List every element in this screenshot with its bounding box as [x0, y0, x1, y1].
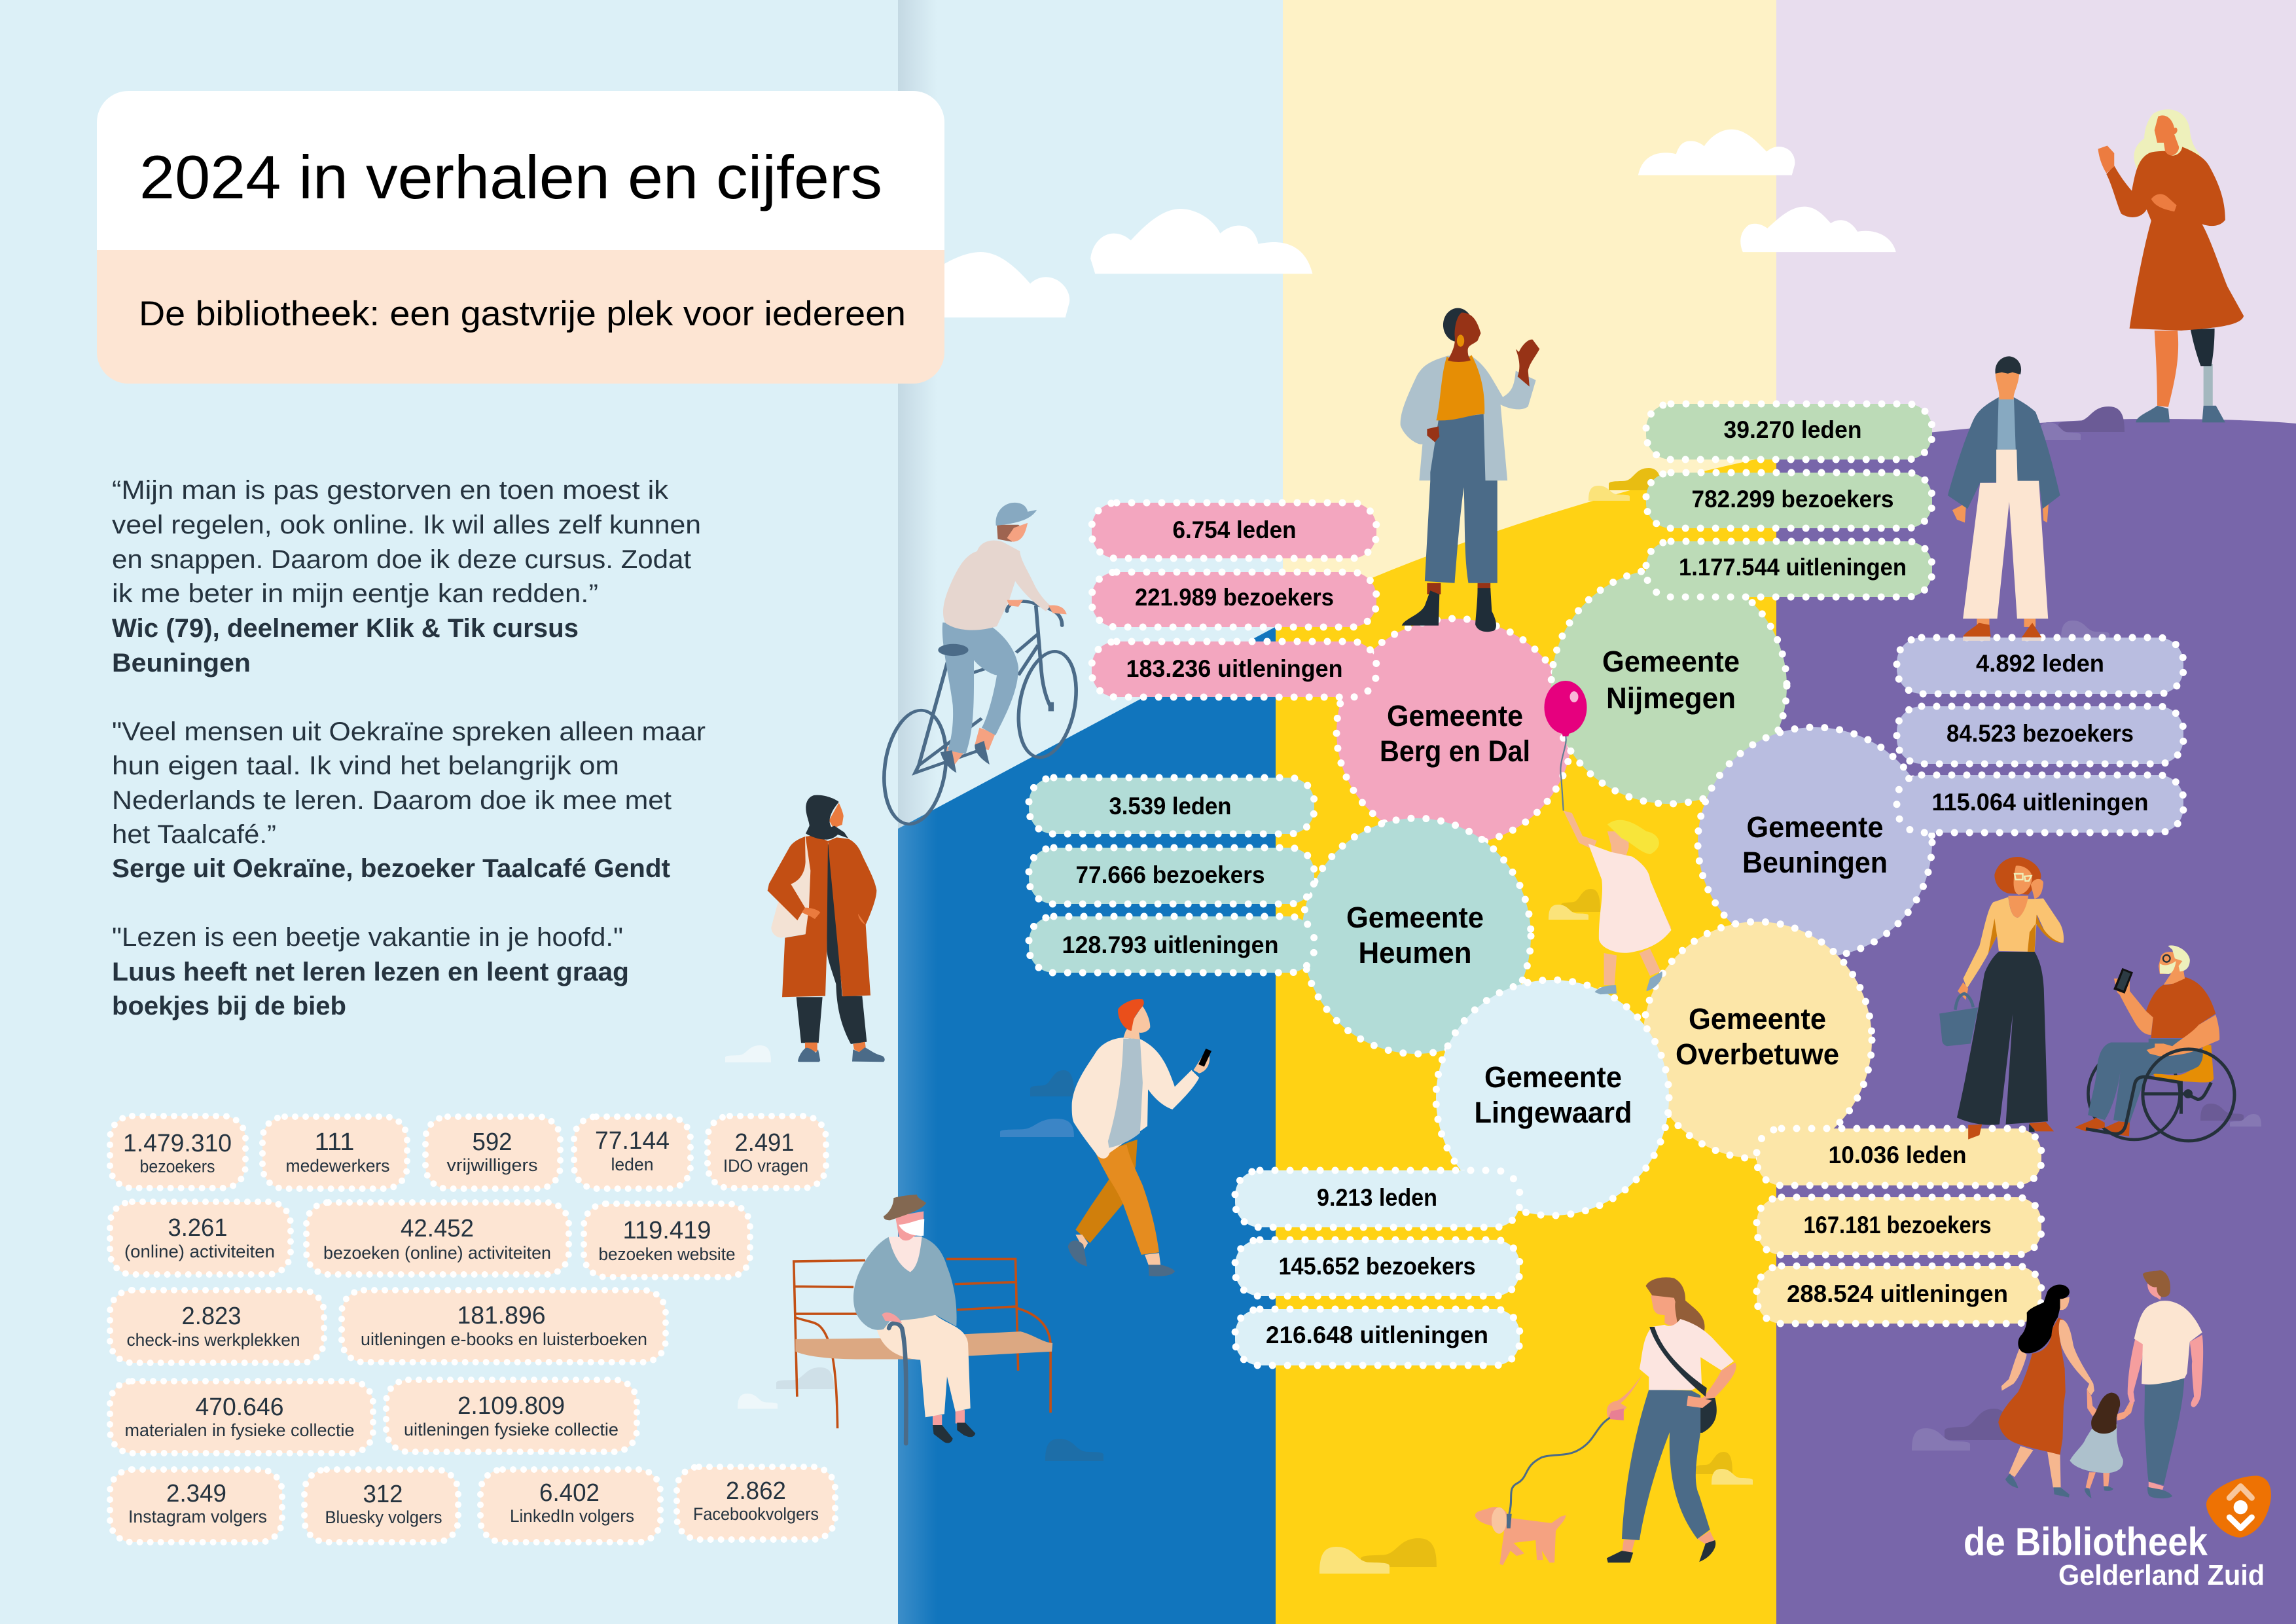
quote: Luus: boekjes bij de bieb: [112, 992, 346, 1020]
cloud: [1090, 209, 1312, 274]
pills: Berg en Dal: 6.754 leden: [1173, 516, 1296, 543]
stat: activiteiten: [110, 1202, 291, 1274]
stat: fysieke collectie: [110, 1381, 373, 1453]
pills: Heumen: 77.666 bezoekers: [1076, 861, 1265, 888]
stat: bezoeken website: [584, 1204, 750, 1277]
figure: woman with red hair: [1939, 857, 2064, 1140]
figure: girl with balloon: [1544, 681, 1672, 994]
pills: Lingewaard: [1235, 1170, 1520, 1365]
stat: fysieke collectie: materialen in fysieke collectie: [124, 1420, 355, 1440]
label: Beuningen: Gemeente: [1746, 810, 1884, 844]
label: Lingewaard: [1474, 1060, 1632, 1129]
quote: Wic: veel regelen, ook online. Ik wil alles zelf kunnen: [112, 511, 701, 539]
figure: old man on bench: [794, 1195, 1052, 1443]
stat: LinkedIn: LinkedIn volgers: [510, 1506, 634, 1526]
pills: Overbetuwe: 10.036 leden: [1829, 1142, 1966, 1168]
stat: e-books: uitleningen e-books en luisterboeken: [361, 1329, 647, 1349]
stat: bezoeken website: bezoeken website: [598, 1244, 736, 1264]
stat: Bluesky: Bluesky volgers: [325, 1507, 442, 1527]
stat: vrijwilligers: 592: [473, 1128, 512, 1156]
stat: bezoekers: bezoekers: [140, 1157, 215, 1176]
label: Nijmegen: Nijmegen: [1606, 681, 1736, 715]
stat: IDO vragen: IDO vragen: [723, 1156, 808, 1176]
pills: Lingewaard: 145.652 bezoekers: [1279, 1253, 1475, 1280]
label: Berg en Dal: [1380, 699, 1530, 768]
quote: Serge: hun eigen taal. Ik vind het belangrijk om: [112, 751, 619, 780]
circle: Beuningen: [1698, 727, 1932, 958]
quote: Serge: het Taalcafé.”: [112, 820, 276, 849]
stat: bezoeken website: 119.419: [623, 1217, 711, 1244]
quote: Serge: [112, 717, 706, 883]
label: Overbetuwe: [1676, 1002, 1839, 1071]
stat: vrijwilligers: vrijwilligers: [446, 1155, 538, 1175]
pills: Beuningen: 4.892 leden: [1976, 650, 2104, 677]
label: Berg en Dal: Berg en Dal: [1380, 734, 1530, 768]
stat: IDO vragen: [708, 1116, 826, 1188]
pills: Overbetuwe: 288.524 uitleningen: [1787, 1280, 2008, 1307]
stat: e-books: [342, 1290, 666, 1362]
stat: LinkedIn: 6.402: [539, 1479, 600, 1507]
yellow hill: [1276, 455, 1776, 1624]
stat: bezoeken activiteiten: bezoeken (online) activiteiten: [323, 1243, 551, 1263]
circle: Berg en Dal: [1336, 619, 1572, 845]
label: Lingewaard: Lingewaard: [1474, 1096, 1632, 1129]
figure: man in wheelchair: [2075, 945, 2234, 1141]
stat: leden: 77.144: [595, 1127, 670, 1155]
stat: fysieke collectie: 470.646: [195, 1394, 284, 1421]
pills: Heumen: [1029, 778, 1314, 973]
quote: Wic: Beuningen: [112, 649, 251, 677]
stat: bezoekers: [110, 1116, 245, 1188]
figure: woman in orange dress: [2098, 109, 2244, 422]
stat: LinkedIn: [480, 1470, 660, 1542]
pills: Lingewaard: 9.213 leden: [1317, 1184, 1437, 1211]
stat: Facebook: 2.862: [726, 1477, 786, 1505]
pills: Berg en Dal: 221.989 bezoekers: [1135, 584, 1334, 611]
circle: Lingewaard: [1436, 980, 1669, 1216]
stat: Instagram: [110, 1470, 282, 1542]
stat: Instagram: 2.349: [166, 1480, 226, 1507]
stat: Facebook: [677, 1467, 835, 1540]
pills: Nijmegen: [1646, 404, 1932, 597]
pills: Berg en Dal: [1092, 503, 1376, 697]
stat: bezoeken activiteiten: [306, 1202, 569, 1274]
stat: Bluesky: 312: [363, 1481, 403, 1508]
stat: uitleningen fysiek: [386, 1380, 637, 1452]
quote: Serge: "Veel mensen uit Oekraïne spreken alleen maar: [112, 717, 706, 746]
stat: e-books: 181.896: [457, 1302, 546, 1329]
pills: Heumen: 3.539 leden: [1109, 793, 1232, 820]
label: Beuningen: [1742, 810, 1888, 879]
quote: Luus: [112, 923, 629, 1020]
label: Beuningen: Beuningen: [1742, 846, 1888, 879]
panel: title: [97, 91, 944, 384]
pills: Heumen: 128.793 uitleningen: [1062, 931, 1279, 958]
figure: woman in hijab: [768, 795, 885, 1062]
label: Heumen: Gemeente: [1346, 901, 1484, 934]
pills: Berg en Dal: 183.236 uitleningen: [1126, 655, 1343, 682]
stat: check-ins: [110, 1290, 324, 1363]
stat: Bluesky: [304, 1470, 458, 1542]
stat: bezoekers: 1.479.310: [123, 1130, 232, 1157]
quote: Wic: Wic (79), deelnemer Klik & Tik cursus: [112, 614, 579, 643]
pills: Beuningen: 115.064 uitleningen: [1932, 789, 2148, 816]
figure: man with jacket: [1948, 356, 2060, 641]
stat: medewerkers: 111: [314, 1128, 355, 1156]
pills: Nijmegen: 782.299 bezoekers: [1691, 486, 1894, 513]
cloud: [916, 252, 1069, 317]
label: Overbetuwe: Overbetuwe: [1676, 1038, 1839, 1071]
spine highlight: [898, 808, 937, 1624]
pills: Overbetuwe: 167.181 bezoekers: [1804, 1212, 1991, 1238]
label: Nijmegen: [1602, 645, 1740, 715]
ground bumps: [725, 406, 2261, 1574]
stat: leden: [574, 1117, 691, 1189]
stat: uitleningen fysiek: 2.109.809: [457, 1392, 565, 1420]
stat: medewerkers: medewerkers: [285, 1156, 390, 1176]
title: 2024 in verhalen en cijfers: [139, 143, 882, 211]
circle: Nijmegen: [1551, 568, 1787, 804]
label: Berg en Dal: Gemeente: [1387, 699, 1523, 732]
logo text: de Bibliotheek: [1964, 1520, 2208, 1564]
figure: woman with dog: [1475, 1277, 1736, 1565]
purple hill: [1776, 419, 2296, 1624]
circle: Heumen: [1302, 818, 1531, 1054]
circle: Overbetuwe: [1643, 922, 1872, 1159]
stat: Instagram: Instagram volgers: [128, 1507, 267, 1526]
stat: IDO vragen: 2.491: [734, 1129, 795, 1157]
quote: Serge: Serge uit Oekraïne, bezoeker Taalcafé Gendt: [112, 854, 670, 883]
logo: Bibliotheek icon: [2206, 1476, 2271, 1538]
figure: cyclist: [878, 503, 1084, 827]
quote: Wic: en snappen. Daarom doe ik deze cursus. Zodat: [112, 545, 691, 574]
logo text: Gelderland Zuid: [2058, 1559, 2265, 1591]
pills: Beuningen: [1897, 638, 2183, 833]
quote: Wic: “Mijn man is pas gestorven en toen moest ik: [112, 476, 669, 505]
quote: Serge: Nederlands te leren. Daarom doe ik mee met: [112, 786, 672, 815]
label: Lingewaard: Gemeente: [1484, 1060, 1622, 1094]
stat: vrijwilligers: [425, 1117, 560, 1189]
figure: woman waving: [1401, 308, 1539, 632]
stat: check-ins: check-ins werkplekken: [127, 1330, 300, 1350]
pills: Nijmegen: 1.177.544 uitleningen: [1679, 554, 1907, 581]
pills: Beuningen: 84.523 bezoekers: [1946, 720, 2134, 747]
quote: Luus: "Lezen is een beetje vakantie in je hoofd.": [112, 923, 623, 952]
label: Overbetuwe: Gemeente: [1689, 1002, 1826, 1036]
quote: Luus: Luus heeft net leren lezen en leent graag: [112, 958, 629, 986]
cloud: [1638, 130, 1795, 175]
figure: family: [1998, 1270, 2203, 1498]
pills: Nijmegen: 39.270 leden: [1724, 416, 1861, 443]
stat: medewerkers: [262, 1117, 407, 1189]
logo text: [1964, 1520, 2265, 1591]
figure: man with phone: [1068, 999, 1211, 1276]
stat: uitleningen fysiek: uitleningen fysieke collectie: [404, 1420, 619, 1439]
stat: activiteiten: (online) activiteiten: [124, 1242, 275, 1261]
pills: Lingewaard: 216.648 uitleningen: [1266, 1322, 1488, 1348]
quote: Wic: [112, 476, 701, 677]
pills: Overbetuwe: [1757, 1128, 2041, 1324]
stat: check-ins: 2.823: [182, 1303, 241, 1330]
subtitle: De bibliotheek: een gastvrije plek voor iedereen: [139, 295, 906, 333]
blue hill: [898, 626, 1276, 1624]
stat: bezoeken activiteiten: 42.452: [401, 1215, 474, 1242]
cloud: [1740, 207, 1896, 252]
quote: Wic: ik me beter in mijn eentje kan redden.”: [112, 579, 598, 608]
label: Heumen: [1346, 901, 1484, 969]
label: Nijmegen: Gemeente: [1602, 645, 1740, 678]
stat: Facebook: Facebookvolgers: [693, 1504, 819, 1524]
stat: leden: leden: [611, 1155, 653, 1174]
stat: activiteiten: 3.261: [168, 1214, 228, 1242]
label: Heumen: Heumen: [1359, 936, 1471, 969]
